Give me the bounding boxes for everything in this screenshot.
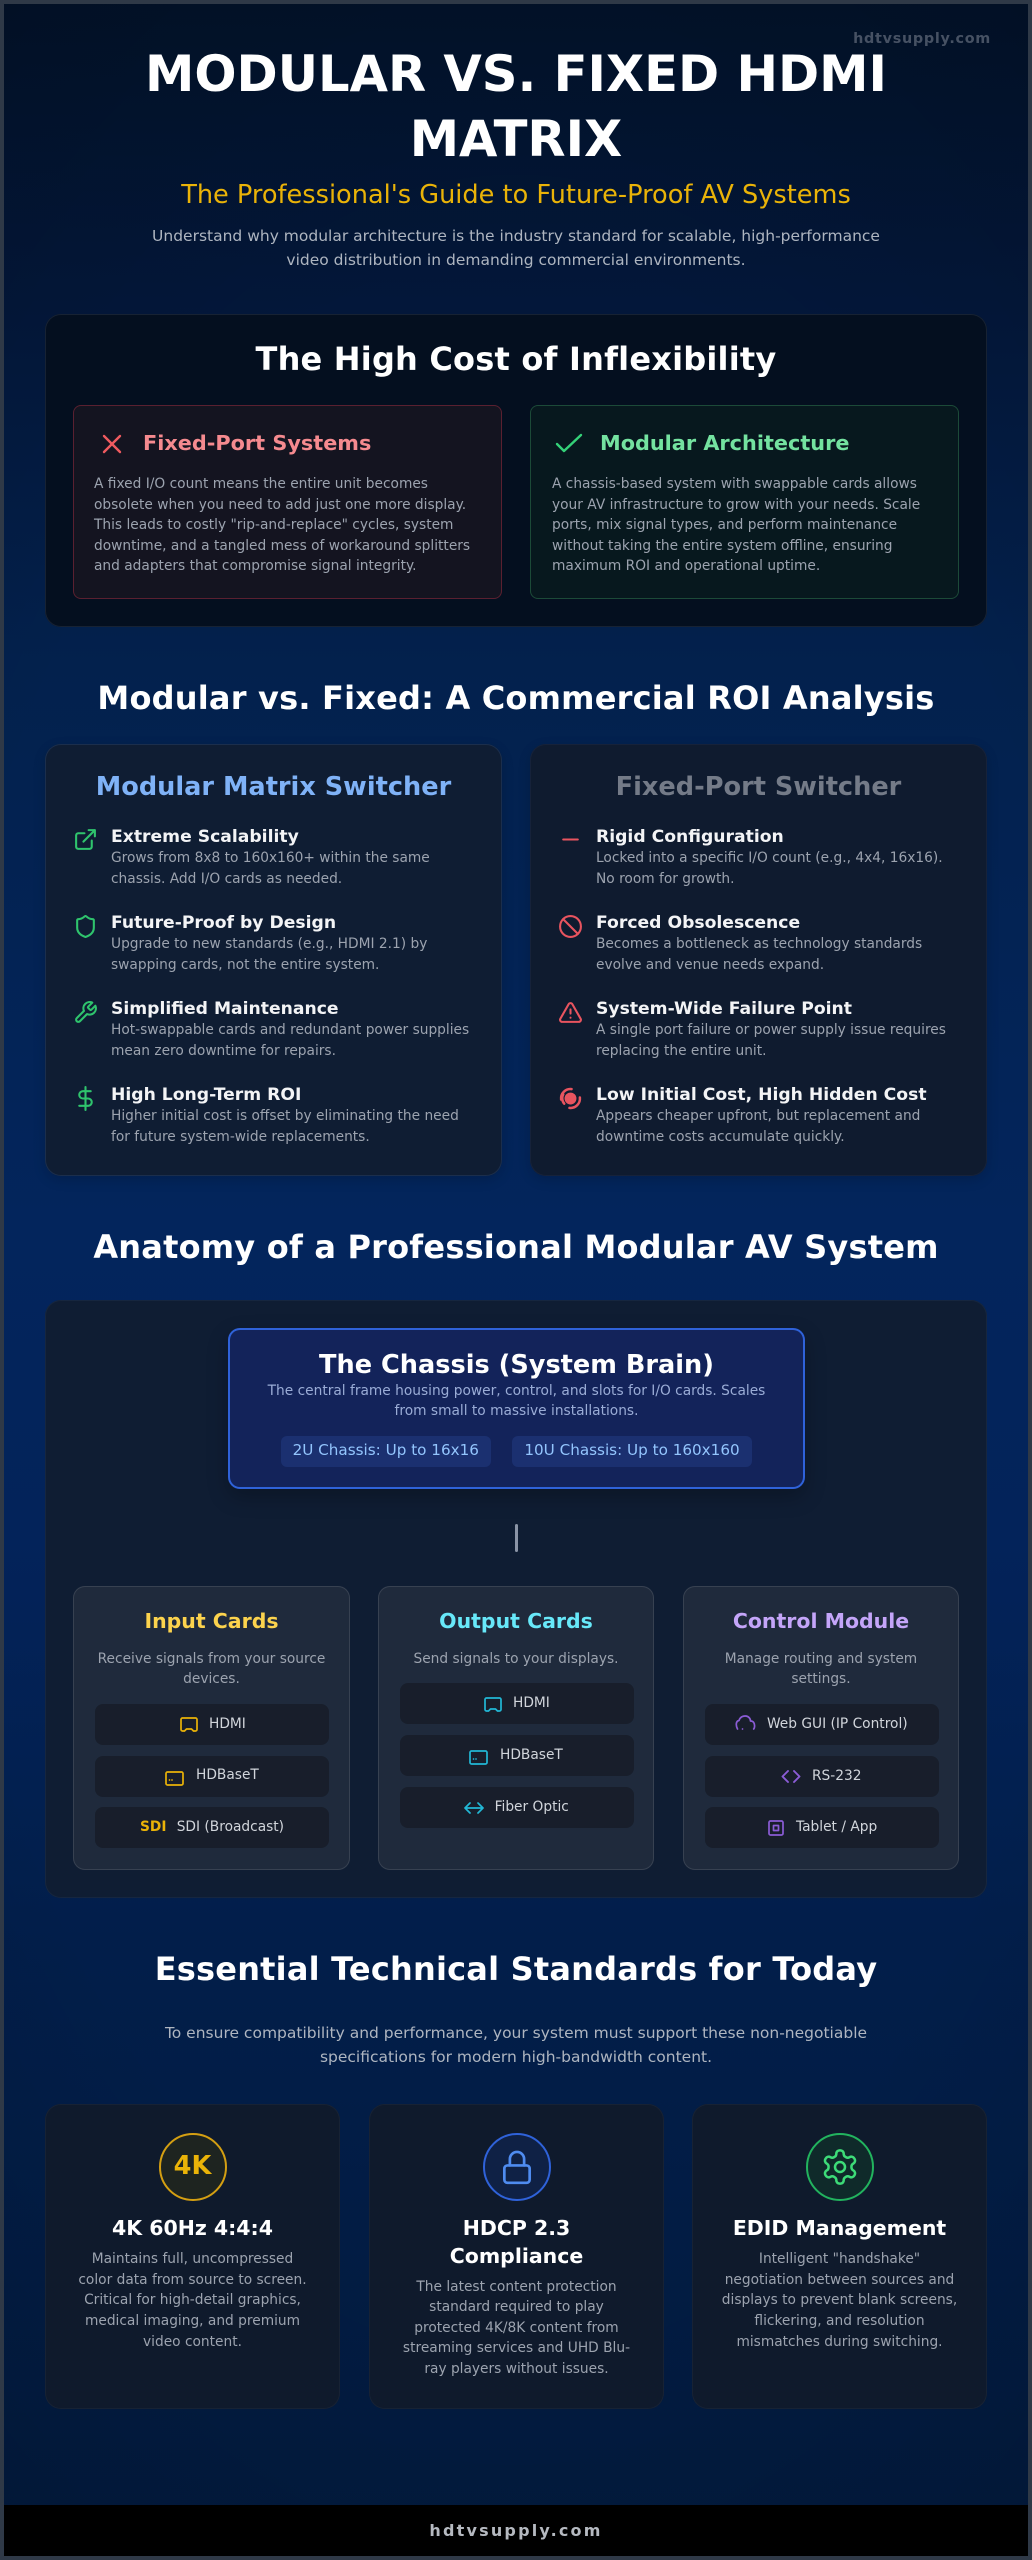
item text: Locked into a specific I/O count (e.g., 4x4, 16x16).: [596, 850, 943, 866]
gear: [820, 2147, 860, 2187]
row: HDBaseT: [95, 1756, 328, 1797]
title: Compliance: [450, 2244, 583, 2268]
icon: code: [782, 1770, 800, 1783]
item text: [111, 1108, 459, 1145]
label: HDBaseT: [196, 1767, 259, 1783]
item title: High Long-Term ROI: [111, 1085, 301, 1105]
text: fixed-port: and adapters that compromise signal integrity.: [94, 558, 417, 574]
text: protected 4K/8K content from: [414, 2320, 619, 2336]
title: MODULAR VS. FIXED HDMI: [145, 45, 887, 103]
pill: 10U: [512, 1436, 752, 1467]
icon: 4K badge: 4K: [174, 2151, 211, 2181]
heading: fixed-port: Fixed-Port Systems: [143, 431, 371, 455]
heading: standards: Essential Technical Standards for Today: [155, 1950, 877, 1988]
card text: [98, 1650, 325, 1687]
standards intro text: [0, 2021, 1032, 2069]
icon: lock badge: [482, 2133, 550, 2201]
row: HDMI: [400, 1683, 634, 1724]
card title: Control Module: [733, 1609, 909, 1633]
text: [45, 2249, 340, 2352]
intro text: [152, 227, 880, 269]
item text: [596, 936, 922, 973]
chassis text: The central frame housing power, control, and slots for I/O cards. Scales: [268, 1383, 765, 1399]
title: MATRIX: [410, 110, 622, 168]
chassis title: The Chassis (System Brain): [319, 1350, 714, 1380]
standards intro text: specifications for modern high-bandwidth content.: [320, 2048, 712, 2066]
card: HDCP 2.3: [369, 2104, 664, 2409]
item title: Forced Obsolescence: [596, 913, 800, 933]
title: EDID Management: [733, 2216, 946, 2240]
pill: 2U: 2U Chassis: Up to 16x16: [293, 1441, 479, 1459]
panel: modular matrix switcher: [45, 744, 502, 1176]
label: HDMI: [513, 1695, 550, 1711]
panel: fixed-port switcher: [530, 744, 987, 1176]
item: future-proof: [76, 913, 427, 973]
card: control module: [683, 1586, 959, 1870]
label: RS-232: [812, 1768, 862, 1784]
row: RS-232: [705, 1756, 938, 1797]
subtitle: The Professional's Guide to Future-Proof AV Systems: [181, 180, 851, 210]
title: HDCP 2.3: [463, 2216, 570, 2240]
icon: tablet: [768, 1820, 784, 1836]
icon: 4K badge: [158, 2133, 226, 2201]
text: The latest content protection: [416, 2279, 617, 2295]
standards intro text: To ensure compatibility and performance, your system must support these non-negotiable: [165, 2024, 867, 2042]
icon: dollar: [78, 1086, 93, 1111]
item text: Hot-swappable cards and redundant power supplies: [111, 1022, 469, 1038]
text: modular: maximum ROI and operational uptime.: [552, 558, 820, 574]
item text: [111, 936, 427, 973]
row: Web GUI: [705, 1704, 938, 1745]
item title: Simplified Maintenance: [111, 999, 339, 1019]
chassis text: [268, 1383, 765, 1419]
icon: hdbaset: [165, 1771, 184, 1786]
text: fixed-port: obsolete when you need to add just one more display.: [94, 497, 466, 513]
card: modular architecture: [530, 405, 959, 599]
panel: anatomy diagram: [45, 1300, 987, 1898]
item text: [111, 850, 430, 887]
text: fixed-port: This leads to costly "rip-and-replace" cycles, system: [94, 517, 453, 533]
card text: [725, 1650, 917, 1687]
text: streaming services and UHD Blu-: [403, 2340, 630, 2356]
icon: shield: [76, 915, 95, 938]
panel: high cost of inflexibility: [45, 314, 987, 627]
text: color data from source to screen.: [78, 2272, 307, 2288]
item: hidden cost: [560, 1085, 927, 1145]
item text: for future system-wide replacements.: [111, 1129, 370, 1145]
row: HDMI: [95, 1704, 328, 1745]
row: SDI: [95, 1807, 328, 1848]
text: Critical for high-detail graphics,: [84, 2292, 301, 2308]
item text: replacing the entire unit.: [596, 1043, 766, 1059]
icon: minus: [562, 838, 579, 840]
connector line: [514, 1524, 518, 1552]
icon: hdmi: [484, 1697, 502, 1712]
footer: [4, 2505, 1028, 2556]
icon: cloud: [735, 1715, 756, 1730]
icon: swirl: [560, 1088, 582, 1110]
text: fixed-port: downtime, and a tangled mess of workaround splitters: [94, 538, 470, 554]
label: Web GUI (IP Control): [767, 1716, 908, 1732]
item text: chassis. Add I/O cards as needed.: [111, 871, 342, 887]
icon: wrench: [75, 1001, 97, 1023]
chassis box: [228, 1328, 805, 1489]
icon: arrows: [464, 1802, 484, 1814]
card title: Input Cards: [144, 1609, 279, 1633]
item: simplified maintenance: [75, 999, 469, 1059]
title: [369, 2214, 664, 2270]
card: EDID management: [692, 2104, 987, 2409]
icon: ban: [559, 915, 582, 938]
footer text: hdtvsupply.com: [429, 2521, 603, 2540]
intro text: video distribution in demanding commercial environments.: [286, 251, 746, 269]
row: Fiber Optic: [400, 1786, 634, 1828]
item text: Becomes a bottleneck as technology standards: [596, 936, 922, 952]
card: output cards: [378, 1586, 654, 1870]
icon: hdbaset: [469, 1750, 488, 1765]
item title: Low Initial Cost, High Hidden Cost: [596, 1085, 927, 1105]
intro text: Understand why modular architecture is the industry standard for scalable, high-performance: [152, 227, 880, 245]
text: fixed-port: A fixed I/O count means the entire unit becomes: [94, 476, 428, 492]
text: [369, 2277, 664, 2380]
card text: settings.: [791, 1671, 851, 1687]
text: [692, 2249, 987, 2352]
item title: System-Wide Failure Point: [596, 999, 852, 1019]
icon: gear badge: [806, 2133, 874, 2201]
item text: [596, 850, 943, 887]
item title: Extreme Scalability: [111, 827, 299, 847]
row: HDBaseT: [400, 1735, 634, 1776]
text: flickering, and resolution: [754, 2313, 925, 2329]
text: modular: ports, mix signal types, and perform maintenance: [552, 517, 897, 533]
item text: downtime costs accumulate quickly.: [596, 1129, 845, 1145]
item text: Grows from 8x8 to 160x160+ within the same: [111, 850, 430, 866]
icon: check: [556, 434, 582, 452]
card text: Receive signals from your source: [98, 1650, 325, 1666]
title: [145, 45, 887, 168]
icon: x: [102, 434, 122, 454]
icon: external link: [75, 829, 96, 850]
lock: [498, 2148, 536, 2186]
item text: Appears cheaper upfront, but replacement and: [596, 1108, 920, 1124]
item text: [596, 1108, 920, 1145]
item title: Future-Proof by Design: [111, 913, 336, 933]
card title: Output Cards: [439, 1609, 593, 1633]
label: HDMI: [209, 1716, 246, 1732]
item text: [596, 1022, 946, 1059]
title: 4K 60Hz 4:4:4: [112, 2216, 273, 2240]
card text: Manage routing and system: [725, 1650, 917, 1666]
item: rigid configuration: [562, 827, 943, 887]
card: 4K 60Hz: [45, 2104, 340, 2409]
card title: fixed: Fixed-Port Switcher: [616, 772, 901, 802]
pill: 10U: 10U Chassis: Up to 160x160: [524, 1441, 740, 1459]
item text: mean zero downtime for repairs.: [111, 1043, 336, 1059]
label: HDBaseT: [500, 1747, 563, 1763]
item text: Upgrade to new standards (e.g., HDMI 2.1) by: [111, 936, 427, 952]
label: Tablet / App: [796, 1819, 877, 1835]
card text: devices.: [183, 1671, 240, 1687]
text: negotiation between sources and: [725, 2272, 954, 2288]
item text: No room for growth.: [596, 871, 734, 887]
heading: ROI analysis: Modular vs. Fixed: A Commercial ROI Analysis: [97, 679, 935, 717]
text: displays to prevent blank screens,: [722, 2292, 957, 2308]
text: ray players without issues.: [424, 2361, 609, 2377]
row: Tablet: [705, 1807, 938, 1848]
text: mismatches during switching.: [736, 2334, 943, 2350]
watermark: hdtvsupply.com: [853, 31, 991, 47]
item text: swapping cards, not the entire system.: [111, 957, 379, 973]
card: input cards: [73, 1586, 350, 1870]
tag: SDI: SDI: [140, 1819, 166, 1835]
item: high ROI: [78, 1085, 459, 1145]
label: SDI (Broadcast): [177, 1819, 284, 1835]
pill: 2U: [280, 1436, 491, 1467]
heading: high cost: The High Cost of Inflexibility: [256, 340, 776, 378]
heading: anatomy: Anatomy of a Professional Modular AV System: [93, 1228, 939, 1266]
label: Fiber Optic: [495, 1798, 569, 1814]
item title: Rigid Configuration: [596, 827, 784, 847]
text: modular: your AV infrastructure to grow with your needs. Scale: [552, 497, 920, 513]
heading: modular: Modular Architecture: [600, 431, 849, 455]
icon: hdmi: [180, 1717, 198, 1732]
item text: Higher initial cost is offset by eliminating the need: [111, 1108, 459, 1124]
item text: [111, 1022, 469, 1059]
text: modular: [552, 476, 920, 574]
card: fixed-port systems: [73, 405, 502, 599]
text: fixed-port: [94, 476, 470, 574]
item: extreme scalability: [75, 827, 430, 887]
item text: A single port failure or power supply issue requires: [596, 1022, 946, 1038]
card text: Send signals to your displays.: [413, 1650, 619, 1666]
text: standard required to play: [429, 2299, 604, 2315]
item: failure point: [559, 999, 946, 1059]
icon: warning triangle: [559, 1002, 582, 1023]
item text: evolve and venue needs expand.: [596, 957, 824, 973]
card title: modular: Modular Matrix Switcher: [96, 772, 451, 802]
chassis text: from small to massive installations.: [395, 1403, 638, 1419]
text: modular: without taking the entire system offline, ensuring: [552, 538, 892, 554]
text: Maintains full, uncompressed: [92, 2251, 293, 2267]
item: forced obsolescence: [559, 913, 922, 973]
text: modular: A chassis-based system with swappable cards allows: [552, 476, 917, 492]
text: Intelligent "handshake": [759, 2251, 920, 2267]
text: medical imaging, and premium: [85, 2313, 300, 2329]
text: video content.: [143, 2334, 242, 2350]
